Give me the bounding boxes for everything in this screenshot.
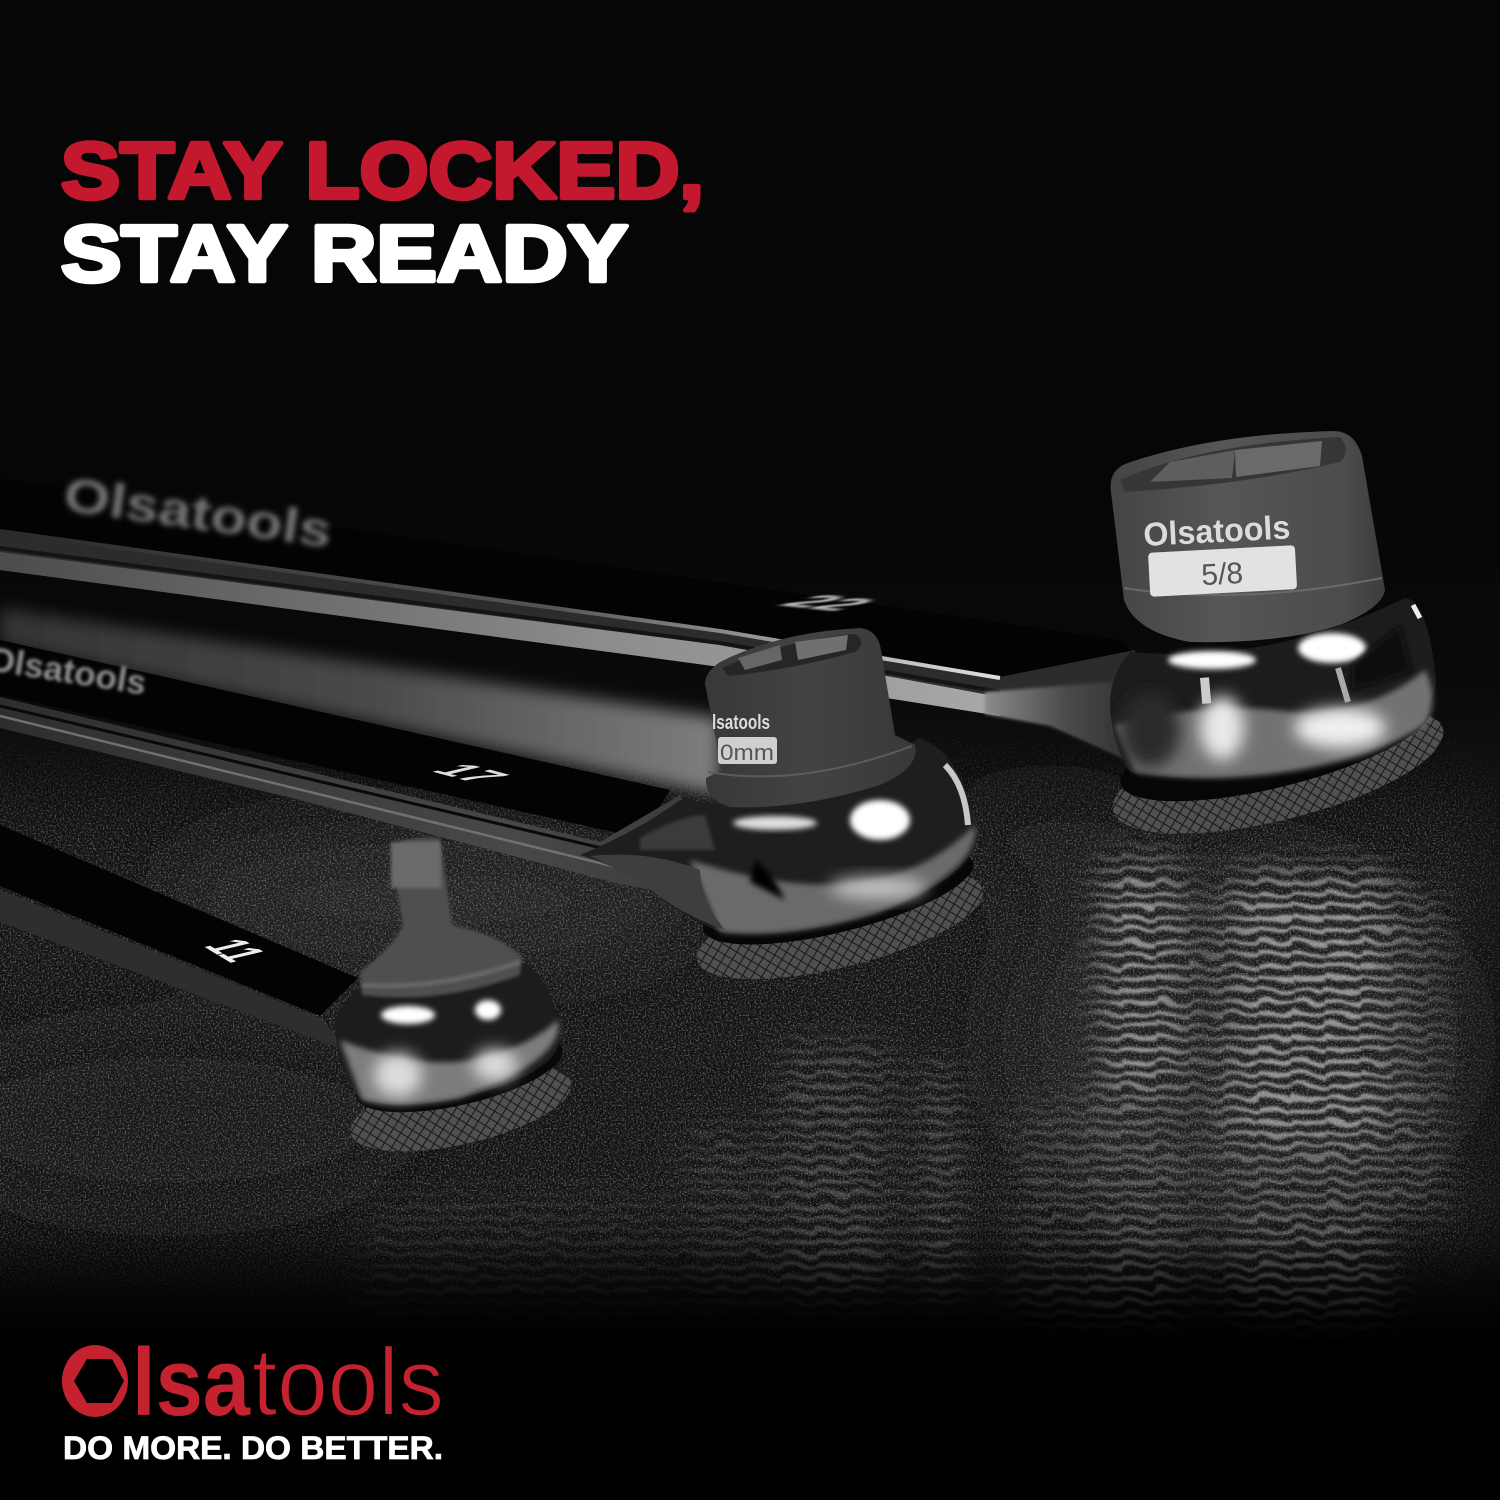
logo bold letters: lsa xyxy=(132,1329,251,1436)
wrench rim xyxy=(0,890,350,1052)
ratchet head: 5/8 xyxy=(1101,431,1455,860)
wrench: front 11 xyxy=(0,825,358,1052)
wrench: middle 17 xyxy=(0,640,730,905)
wrench face xyxy=(0,825,358,1016)
chrome body xyxy=(335,962,560,1105)
ratchet head: 11 with bit xyxy=(335,838,579,1168)
wrench face xyxy=(0,640,670,838)
knurled ring xyxy=(1101,666,1455,860)
wrench face xyxy=(0,478,1135,678)
size label: 0mm xyxy=(720,740,774,765)
logo light letters: tools xyxy=(252,1329,444,1436)
logo hex O xyxy=(62,1345,128,1417)
headline xyxy=(61,126,704,298)
ratchet head: 10mm xyxy=(580,628,993,1001)
socket brand: lsatools xyxy=(712,712,770,734)
embossed brand text on handle: Olsatools xyxy=(60,468,335,558)
knurled ring xyxy=(687,827,993,1001)
knurled ring xyxy=(343,1018,579,1168)
size marking 22: 22 xyxy=(765,591,890,615)
socket 5/8 xyxy=(1111,431,1385,642)
wrench rim xyxy=(0,530,1150,770)
headline line 1: STAY LOCKED, xyxy=(61,126,704,215)
size label xyxy=(1148,545,1297,597)
lit mat band between wrenches xyxy=(0,608,720,795)
socket 10mm xyxy=(705,628,916,807)
chrome highlights xyxy=(1115,605,1432,778)
size label: 5/8 xyxy=(1201,557,1244,592)
size marking 17: 17 xyxy=(418,761,521,786)
chrome highlights xyxy=(590,765,975,934)
wrench rim xyxy=(0,697,730,905)
brand logo xyxy=(62,1329,444,1466)
chrome body xyxy=(580,738,977,934)
hex bit xyxy=(360,838,522,998)
background: dark textured mat xyxy=(0,598,1500,1326)
socket brand: Olsatools xyxy=(1142,508,1291,553)
chrome body xyxy=(1110,598,1436,778)
size marking 11: 11 xyxy=(191,935,278,966)
wrench: back 22 xyxy=(0,468,1150,770)
chrome highlights xyxy=(340,1000,558,1105)
tagline: DO MORE. DO BETTER. xyxy=(63,1430,443,1466)
headline line 2: STAY READY xyxy=(61,209,628,298)
